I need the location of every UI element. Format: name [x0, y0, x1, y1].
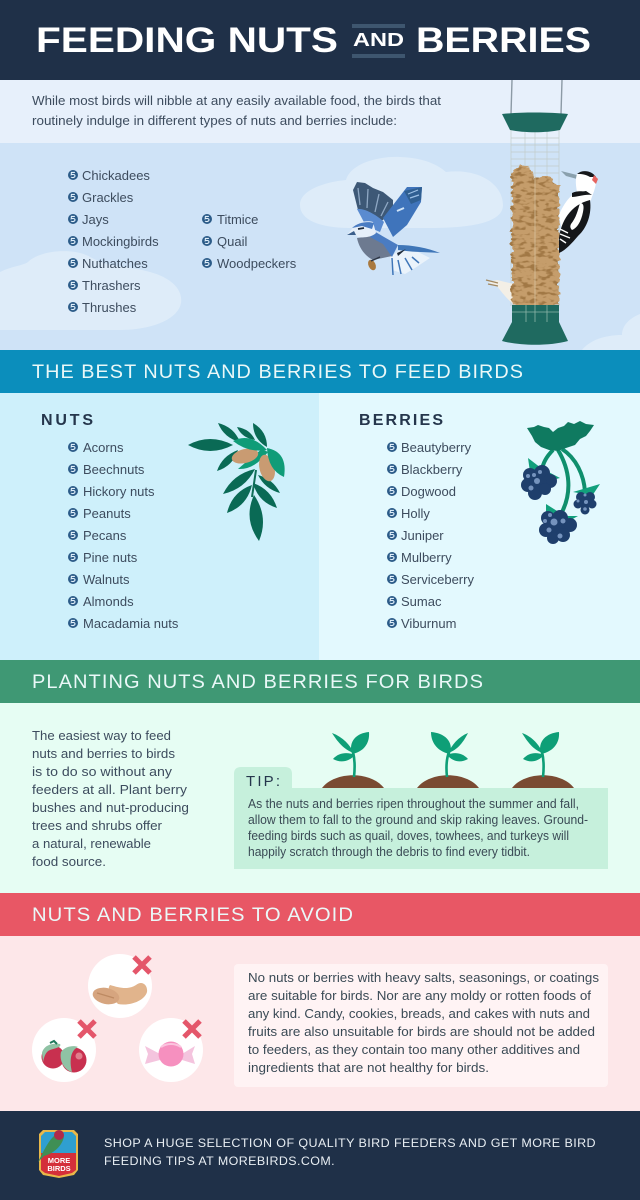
- section heading: planting: [0, 660, 640, 703]
- red cross: [184, 1021, 200, 1037]
- icon: sprout two: [417, 732, 479, 788]
- section heading: best nuts and berries: [0, 350, 640, 393]
- bird list column two: [202, 212, 297, 271]
- planting text: a natural, renewable: [32, 836, 151, 851]
- text box: what to avoid: to feeders, as they contain too many other additives and: [248, 1043, 580, 1057]
- berries heading: BERRIES: [359, 412, 443, 429]
- feeder mesh cage: [511, 130, 559, 306]
- icon: salted nuts crossed out: [88, 954, 152, 1018]
- nuts list: Beechnuts: [83, 462, 145, 477]
- sepals: [528, 458, 600, 526]
- section heading: avoid: NUTS AND BERRIES TO AVOID: [32, 905, 354, 926]
- berries list: Dogwood: [401, 484, 456, 499]
- panel: bird list on sky: [0, 143, 640, 350]
- tip text: feeding birds such as quail, doves, towhees, and turkeys will: [248, 829, 569, 843]
- berries list: Beautyberry: [401, 440, 472, 455]
- footer text: [104, 1136, 596, 1168]
- berry stems: [542, 449, 585, 512]
- tip label: TIP:: [246, 773, 280, 790]
- logo: more birds: [38, 1130, 78, 1178]
- red cross: [134, 957, 150, 973]
- bird list column two: Titmice: [217, 212, 258, 227]
- bird list column one: Jays: [82, 212, 109, 227]
- text box: what to avoid: [234, 964, 608, 1087]
- upper bright leaves: [233, 438, 285, 477]
- berries list: Serviceberry: [401, 572, 474, 587]
- nuts list: Macadamia nuts: [83, 616, 179, 631]
- nuts list: [68, 440, 179, 631]
- title: feeding nuts: FEEDING NUTS: [36, 21, 338, 60]
- bird list column one: Thrashers: [82, 278, 141, 293]
- icon: nut branch: [188, 423, 285, 541]
- bird list column one: Chickadees: [82, 168, 150, 183]
- nuts list: Hickory nuts: [83, 484, 155, 499]
- text box: what to avoid: any kind. Candy, cookies, breads, and cakes with nuts and: [248, 1007, 590, 1021]
- bird list column one: Grackles: [82, 190, 134, 205]
- planting text: bushes and nut-producing: [32, 800, 189, 815]
- planting text: nuts and berries to birds: [32, 746, 176, 761]
- nuts list: Pine nuts: [83, 550, 138, 565]
- bird list column two: Woodpeckers: [217, 256, 297, 271]
- icon: sprout one: [322, 732, 384, 788]
- text box: what to avoid: No nuts or berries with heavy salts, seasonings, or coatings: [248, 971, 599, 985]
- icon: blue jay in flight: [347, 182, 440, 275]
- planting text: trees and shrubs offer: [32, 818, 163, 833]
- tip text: As the nuts and berries ripen throughout the summer and fall,: [248, 797, 579, 811]
- clouds: [0, 157, 640, 350]
- panel: berries: [319, 393, 640, 660]
- small bird behind feeder: [486, 280, 514, 304]
- footer text: SHOP A HUGE SELECTION OF QUALITY BIRD FEEDERS AND GET MORE BIRD: [104, 1136, 596, 1150]
- berries list: Holly: [401, 506, 430, 521]
- icon: candy crossed out: [139, 1018, 203, 1082]
- berries list: Viburnum: [401, 616, 456, 631]
- footer text: FEEDING TIPS AT MOREBIRDS.COM.: [104, 1154, 335, 1168]
- logo: more birds: BIRDS: [47, 1164, 71, 1173]
- intro text: [32, 93, 441, 128]
- bird list column two: Quail: [217, 234, 247, 249]
- lower bright leaf: [238, 449, 268, 469]
- bird list column one: Mockingbirds: [82, 234, 159, 249]
- logo: more birds: MORE: [48, 1156, 70, 1165]
- icon: blackberry sprig: [521, 421, 600, 544]
- section heading: planting: PLANTING NUTS AND BERRIES FOR BIRDS: [32, 672, 484, 693]
- berries list: Mulberry: [401, 550, 452, 565]
- nuts list: Almonds: [83, 594, 134, 609]
- berries list: Juniper: [401, 528, 444, 543]
- intro text: routinely indulge in different types of nuts and berries include:: [32, 113, 397, 128]
- nuts list: Pecans: [83, 528, 127, 543]
- title: and: AND: [353, 30, 404, 50]
- icon: rotten berries crossed out: [32, 1018, 96, 1082]
- nuts list: Peanuts: [83, 506, 131, 521]
- panel: avoid: [0, 936, 640, 1111]
- bird list column one: Thrushes: [82, 300, 137, 315]
- title: and: [352, 24, 405, 58]
- planting text: [32, 728, 189, 869]
- tip text: [248, 797, 588, 859]
- text box: what to avoid: fruits are also unsuitable for birds are should not be added: [248, 1025, 595, 1039]
- panel: nuts: [0, 393, 319, 660]
- title banner: [0, 0, 640, 80]
- berries list: [387, 440, 474, 631]
- panel: intro band: [0, 80, 640, 143]
- berries list: Blackberry: [401, 462, 463, 477]
- nuts list: Acorns: [83, 440, 124, 455]
- planting text: is to do so without any: [32, 764, 173, 779]
- icon: bird feeder: [486, 80, 598, 345]
- section heading: best nuts and berries: THE BEST NUTS AND BERRIES TO FEED BIRDS: [32, 362, 524, 383]
- woodpecker: [559, 171, 598, 253]
- text box: what to avoid: are suitable for birds. Nor are any moldy or rotten foods of: [248, 989, 592, 1003]
- berries list: Sumac: [401, 594, 442, 609]
- red cross: [79, 1021, 95, 1037]
- panel: planting: [0, 703, 640, 893]
- planting text: The easiest way to feed: [32, 728, 171, 743]
- berry leaves: [527, 421, 594, 451]
- berries: [521, 465, 596, 544]
- icon: sprout three: [512, 732, 574, 788]
- bird list column one: Nuthatches: [82, 256, 148, 271]
- text box: what to avoid: ingredients that are not healthy for birds.: [248, 1061, 489, 1075]
- feeder base: [502, 305, 568, 345]
- intro text: While most birds will nibble at any easily available food, the birds that: [32, 93, 441, 108]
- planting text: feeders at all. Plant berry: [32, 782, 188, 797]
- planting text: food source.: [32, 854, 106, 869]
- tip text: happily scratch through the debris to find every tidbit.: [248, 845, 530, 859]
- nuts heading: NUTS: [41, 412, 93, 429]
- title: berries: BERRIES: [416, 21, 591, 60]
- nuts list: Walnuts: [83, 572, 130, 587]
- feeder hanger wires: [511, 80, 562, 114]
- nuts on branch: [230, 446, 278, 483]
- section heading: avoid: [0, 893, 640, 936]
- feeder seed column: [512, 165, 559, 306]
- tip text: allow them to fall to the ground and skip raking leaves. Ground-: [248, 813, 588, 827]
- bird list column one: [68, 168, 159, 315]
- footer banner: [0, 1111, 640, 1200]
- callout: tip: [234, 767, 608, 869]
- feeder top cap: [502, 112, 568, 132]
